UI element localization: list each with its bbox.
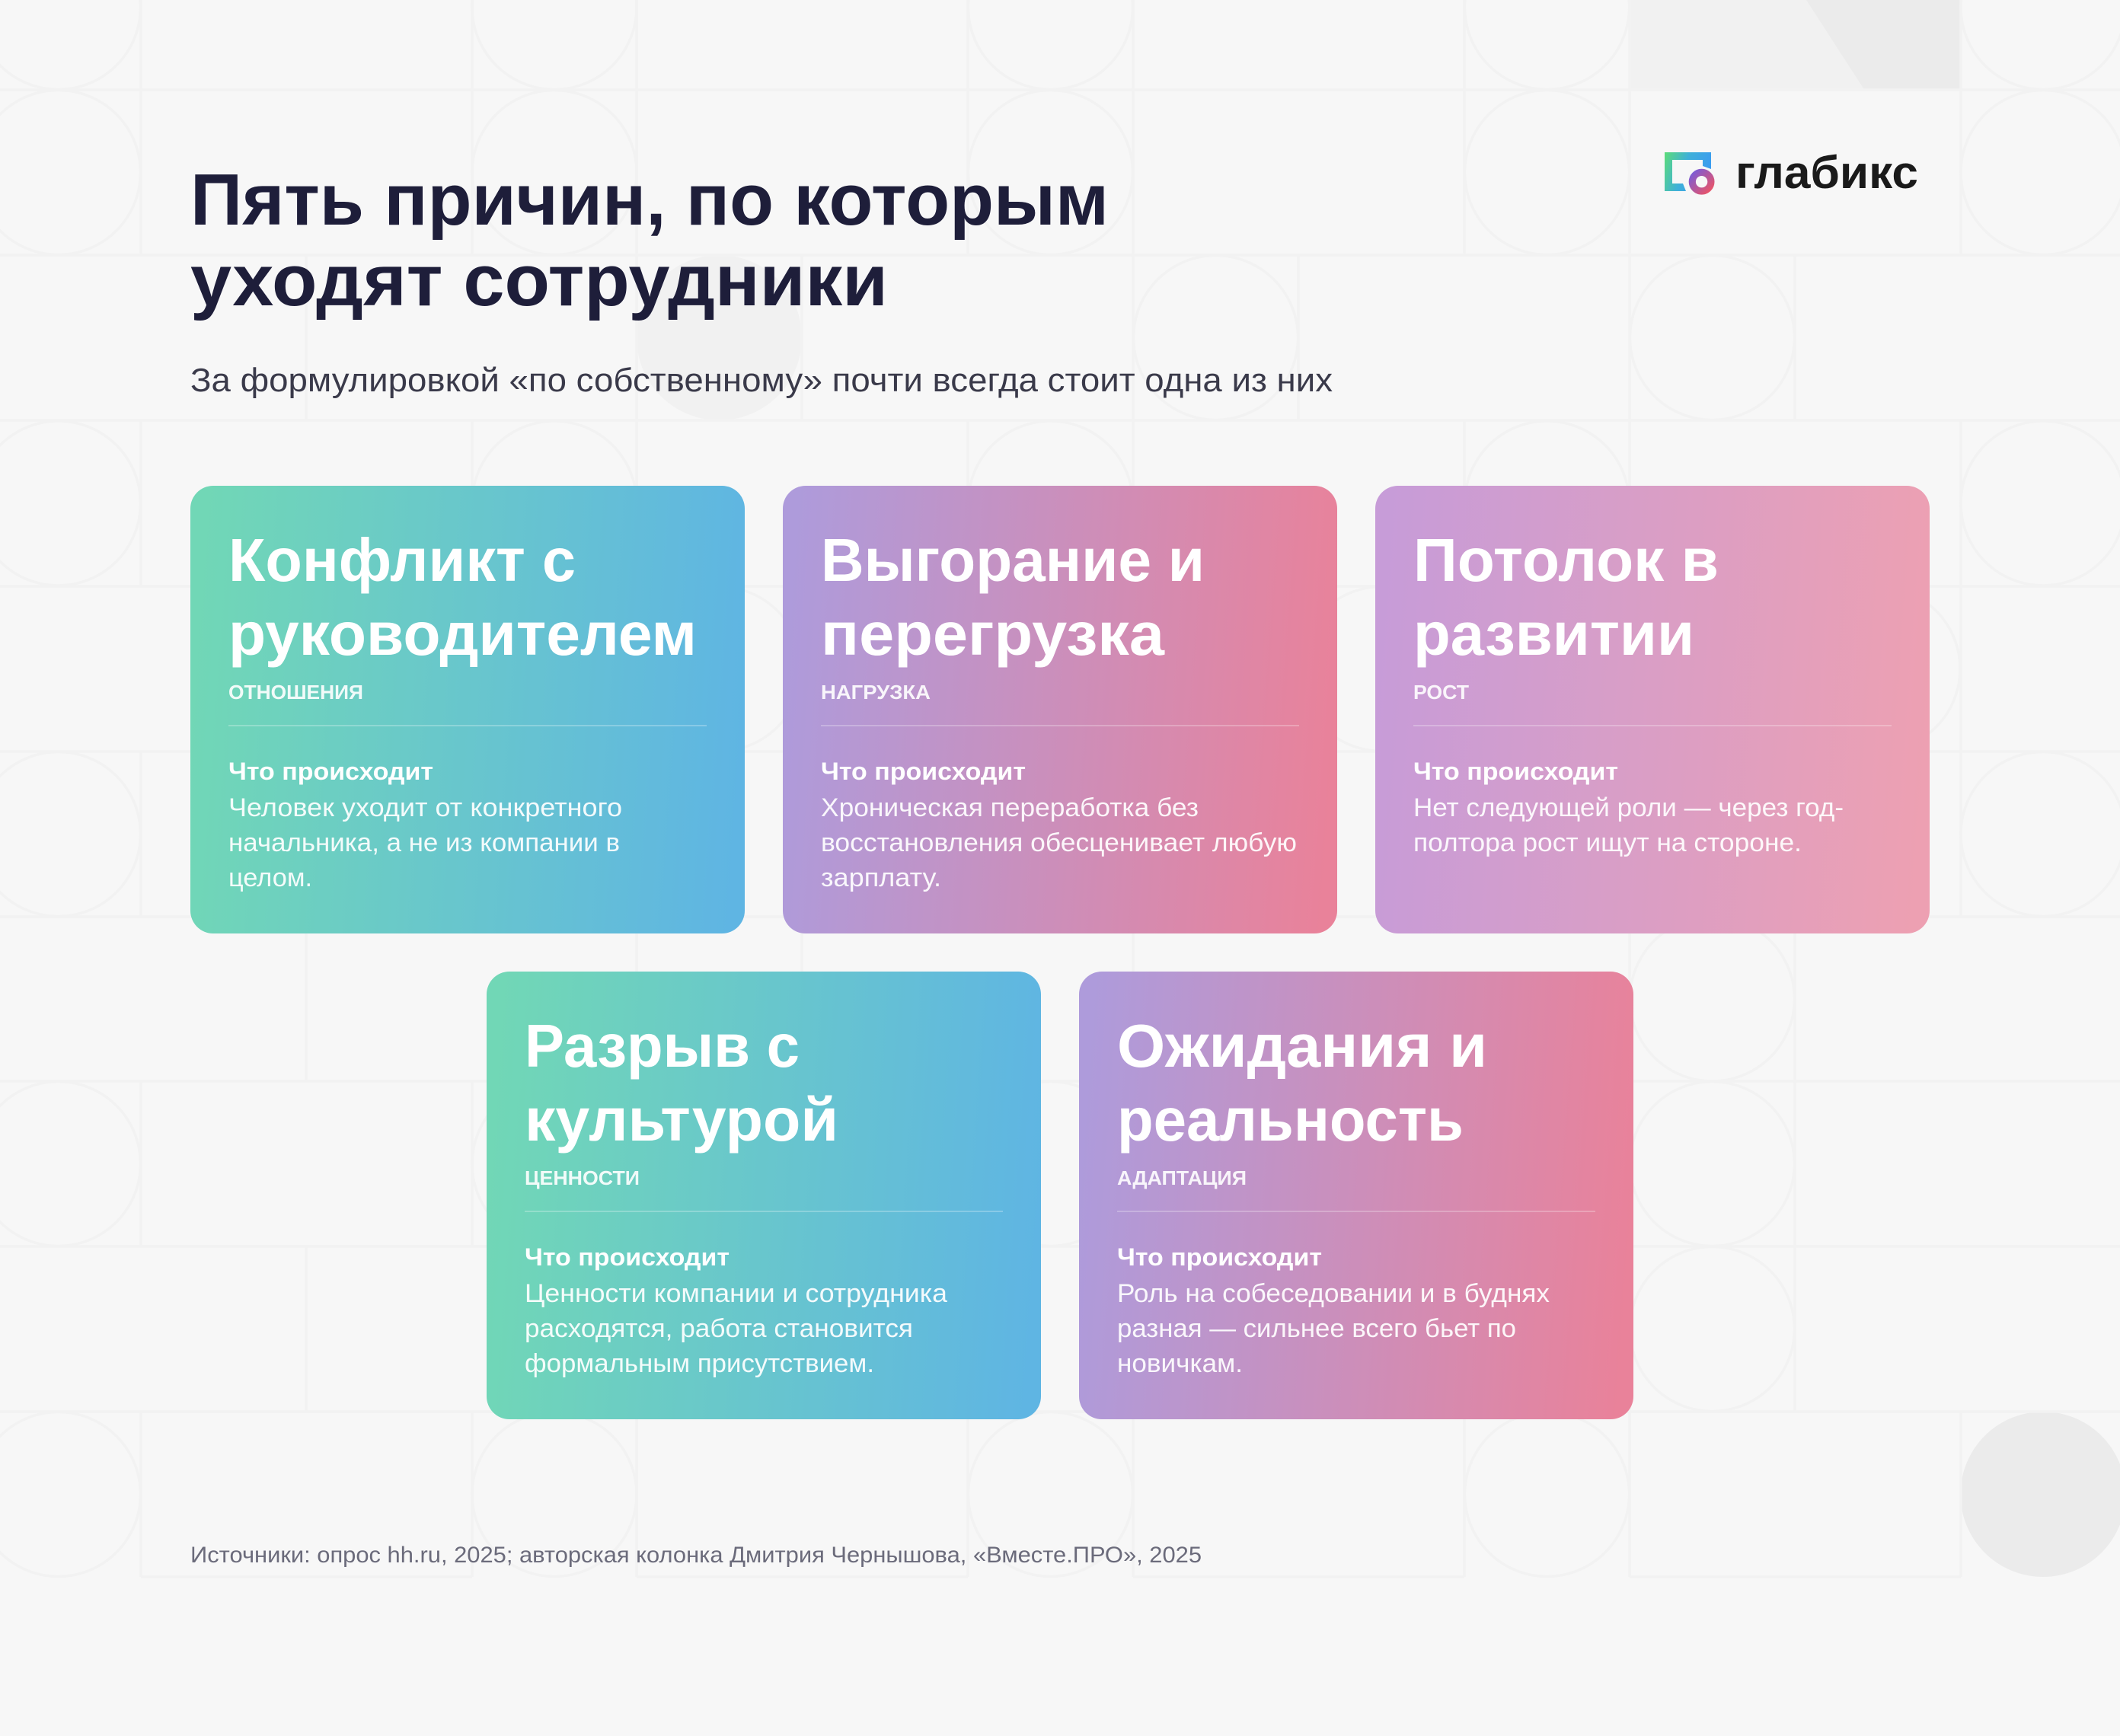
card body text: разная — сильнее всего бьет по — [1117, 1314, 1516, 1343]
card label: Что происходит — [228, 758, 433, 785]
title — [190, 159, 1109, 321]
card body text: целом. — [228, 863, 312, 892]
subtitle: За формулировкой «по собственному» почти всегда стоит одна из них — [190, 362, 1333, 399]
card body text: формальным присутствием. — [525, 1349, 874, 1378]
card body text: полтора рост ищут на стороне. — [1413, 828, 1802, 857]
card body text: начальника, а не из компании в — [228, 828, 620, 857]
card body text: расходятся, работа становится — [525, 1314, 913, 1343]
card heading: перегрузка — [821, 600, 1165, 668]
card heading — [821, 526, 1205, 668]
card body text: Человек уходит от конкретного — [228, 793, 622, 822]
card tag: НАГРУЗКА — [821, 681, 931, 704]
panel: Потолок в развитии — [1375, 486, 1930, 933]
card heading — [1413, 526, 1719, 668]
title: уходят сотрудники — [190, 240, 888, 321]
card heading: культурой — [525, 1086, 838, 1154]
card body text — [228, 793, 622, 892]
card heading: Выгорание и — [821, 526, 1205, 594]
card heading: Разрыв с — [525, 1012, 800, 1080]
card body text: Нет следующей роли — через год- — [1413, 793, 1844, 822]
panel: Конфликт с руководителем — [190, 486, 745, 933]
card heading: Потолок в — [1413, 526, 1719, 594]
card body text — [1413, 793, 1844, 857]
card heading: Конфликт с — [228, 526, 576, 594]
card tag: АДАПТАЦИЯ — [1117, 1166, 1247, 1189]
card heading — [525, 1012, 838, 1154]
logo wordmark: глабикс — [1735, 147, 1918, 198]
card label: Что происходит — [821, 758, 1026, 785]
card body text: новичкам. — [1117, 1349, 1243, 1378]
card label: Что происходит — [525, 1243, 730, 1271]
card heading: руководителем — [228, 600, 697, 668]
card body text — [525, 1279, 947, 1378]
card tag: ОТНОШЕНИЯ — [228, 681, 363, 704]
card heading: реальность — [1117, 1086, 1464, 1154]
card heading: Ожидания и — [1117, 1012, 1487, 1080]
card heading — [1117, 1012, 1487, 1154]
card body text: Роль на собеседовании и в буднях — [1117, 1279, 1550, 1308]
panel: Разрыв с культурой — [487, 972, 1041, 1419]
panel: Ожидания и реальность — [1079, 972, 1633, 1419]
title: Пять причин, по которым — [190, 159, 1109, 241]
panel: Выгорание и перегрузка — [783, 486, 1337, 933]
card body text — [1117, 1279, 1550, 1378]
card body text: Ценности компании и сотрудника — [525, 1279, 947, 1308]
card heading — [228, 526, 697, 668]
card body text: восстановления обесценивает любую — [821, 828, 1297, 857]
card body text: зарплату. — [821, 863, 941, 892]
card label: Что происходит — [1117, 1243, 1322, 1271]
logo: глабикс — [1665, 147, 1918, 198]
card label: Что происходит — [1413, 758, 1618, 785]
card tag: ЦЕННОСТИ — [525, 1166, 640, 1189]
card heading: развитии — [1413, 600, 1694, 668]
icon: logo frame and ring — [1665, 152, 1711, 191]
card body text: Хроническая переработка без — [821, 793, 1199, 822]
card tag: РОСТ — [1413, 681, 1469, 704]
footer: sources: Источники: опрос hh.ru, 2025; авторская колонка Дмитрия Чернышова, «Вместе.ПРО», 2025 — [190, 1543, 1202, 1568]
card body text — [821, 793, 1297, 892]
